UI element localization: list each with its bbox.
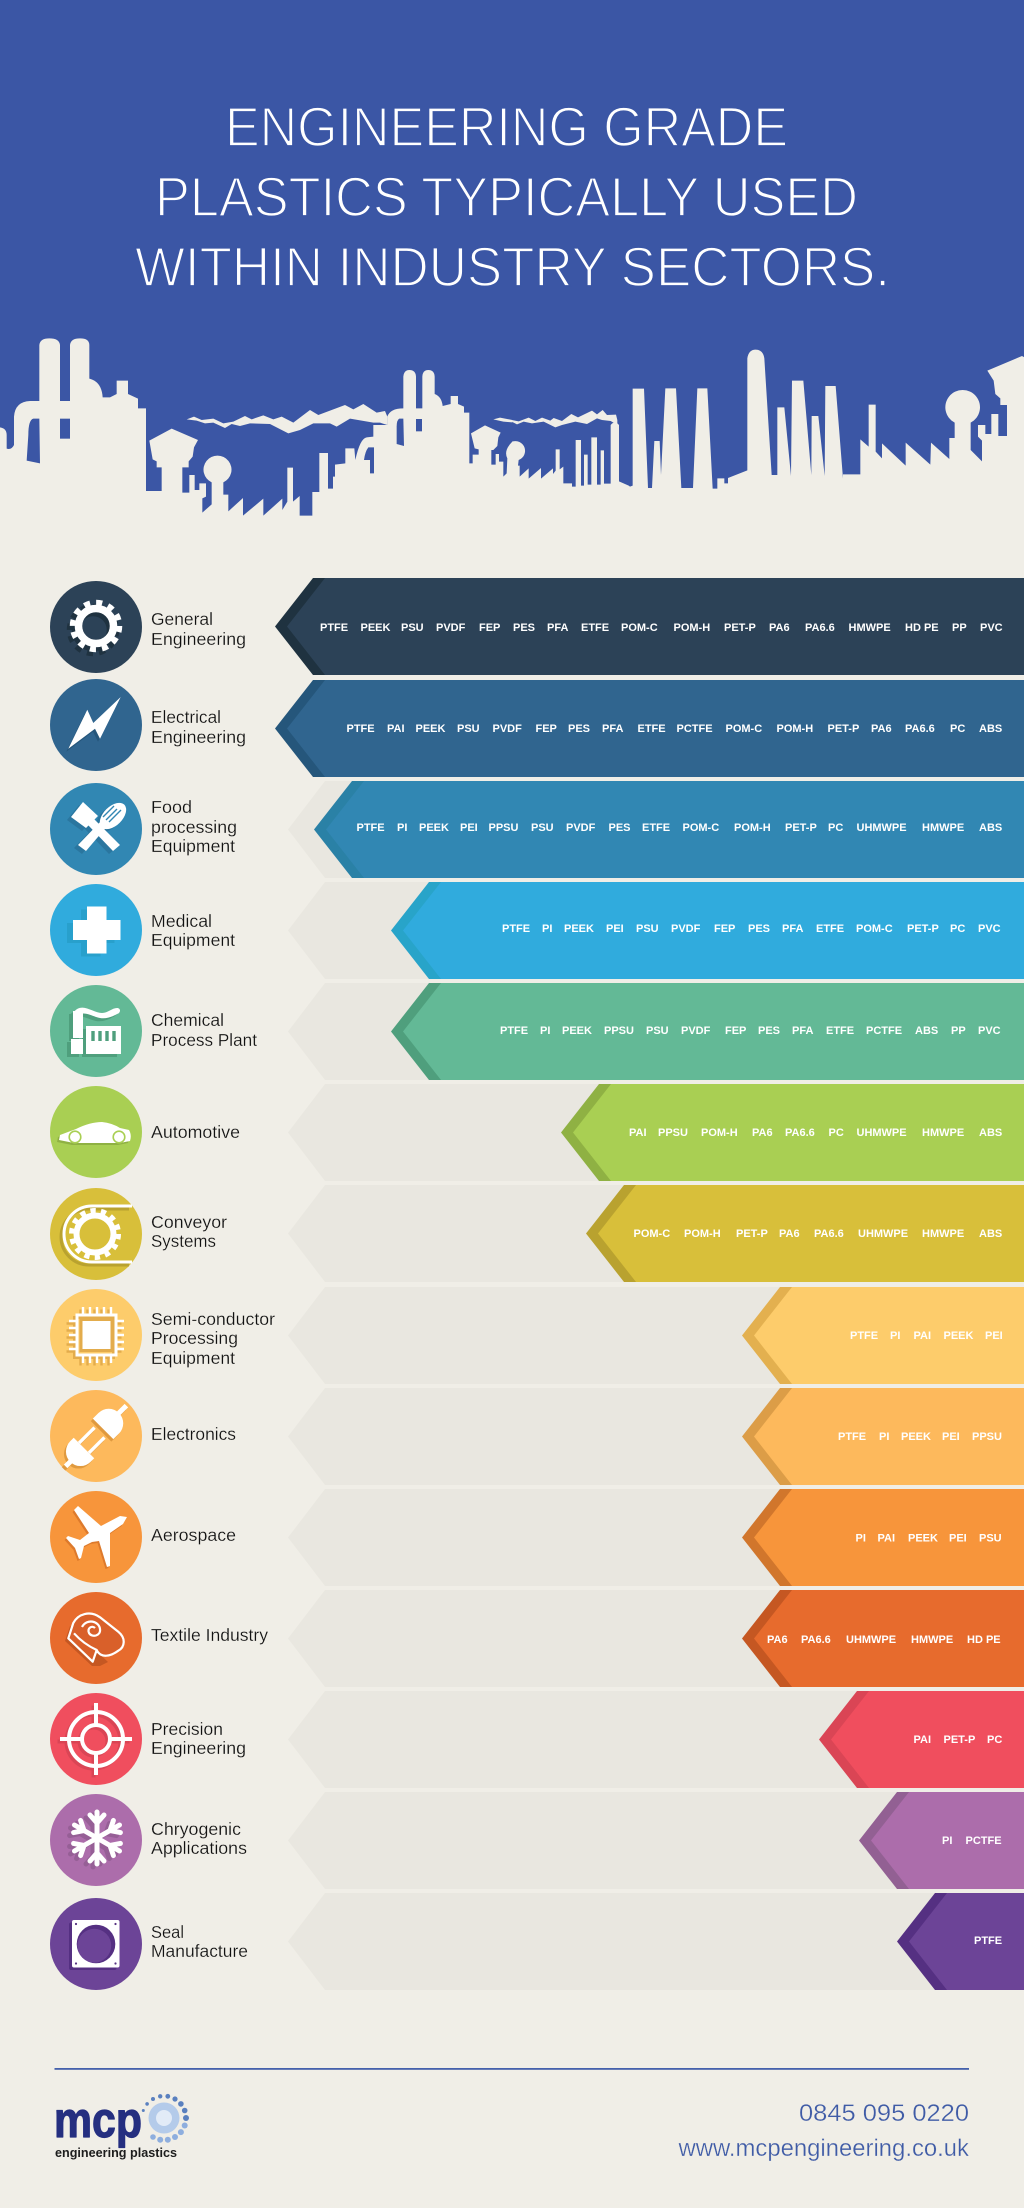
plastics list: PA6: [752, 1127, 773, 1139]
plastics list: HMWPE: [922, 1228, 964, 1240]
plastics list: ABS: [979, 822, 1002, 834]
plastics list: HMWPE: [922, 822, 964, 834]
plastics list: POM-H: [674, 622, 710, 634]
plastics list: PA6: [769, 622, 790, 634]
plastics list: PES: [758, 1025, 780, 1037]
plastics list: PPSU: [658, 1127, 688, 1139]
row: Food processing Equipment: [50, 781, 1024, 878]
plastics list: ETFE: [642, 822, 670, 834]
plastics list: ETFE: [816, 923, 844, 935]
plastics list: FEP: [536, 723, 557, 735]
row: Chemical Process Plant: [50, 983, 1024, 1080]
arrow bar: [742, 1287, 1024, 1384]
logo tagline: engineering plastics: [55, 2145, 177, 2160]
icon: fabric roll: [50, 1592, 142, 1684]
plastics list: PPSU: [604, 1025, 634, 1037]
plastics list: PAI: [387, 723, 405, 735]
plastics list: PSU: [636, 923, 659, 935]
icon: car: [50, 1086, 142, 1178]
plastics list: PET-P: [828, 723, 859, 735]
header banner: [0, 0, 1024, 560]
label: Textile Industry: Textile Industry: [151, 1625, 268, 1645]
icon: lightning bolt: [50, 679, 142, 771]
icon: crosshair target: [50, 1693, 142, 1785]
label: Food processing Equipment: processing: [151, 817, 237, 837]
plastics list: UHMWPE: [846, 1634, 896, 1646]
label: Semi-conductor Processing Equipment: Semi-conductor: [151, 1309, 275, 1329]
label: Seal Manufacture: Manufacture: [151, 1941, 248, 1961]
plastics list: PEI: [460, 822, 478, 834]
arrow bar: [742, 1590, 1024, 1687]
arrow bar: [742, 1388, 1024, 1485]
plastics list: PFA: [547, 622, 568, 634]
plastics list: PFA: [782, 923, 803, 935]
row: Aerospace: [50, 1489, 1024, 1586]
plastics list: POM-C: [682, 822, 719, 834]
plastics list: PVC: [978, 923, 1001, 935]
plastics list: PA6.6: [814, 1228, 844, 1240]
plastics list: PA6: [871, 723, 892, 735]
plastics list: PET-P: [944, 1734, 975, 1746]
arrow bar: [859, 1792, 1024, 1889]
label: Semi-conductor Processing Equipment: Equipment: [151, 1348, 235, 1368]
logo ring: [142, 2094, 189, 2143]
row: Textile Industry: [50, 1590, 1024, 1687]
plastics list: PET-P: [907, 923, 939, 935]
background track: [288, 882, 1024, 979]
plastics list: PEEK: [419, 822, 449, 834]
label: Chemical Process Plant: Chemical: [151, 1010, 224, 1030]
plastics list: POM-H: [684, 1228, 721, 1240]
arrow bar: [391, 882, 1024, 979]
label: Electrical Engineering: Engineering: [151, 727, 246, 747]
logo wordmark: mcp: [54, 2092, 142, 2148]
plastics list: ETFE: [638, 723, 666, 735]
plastics list: PEI: [606, 923, 624, 935]
plastics list: PP: [951, 1025, 966, 1037]
plastics list: PA6.6: [801, 1634, 831, 1646]
plastics list: UHMWPE: [856, 822, 907, 834]
plastics list: PPSU: [488, 822, 519, 834]
plastics list: UHMWPE: [856, 1127, 907, 1139]
background track: [288, 781, 1024, 878]
plastics list: POM-C: [856, 923, 893, 935]
plastics list: ABS: [979, 723, 1002, 735]
plastics list: PEEK: [562, 1025, 592, 1037]
plastics list: PES: [748, 923, 770, 935]
plastics list: PES: [513, 622, 535, 634]
plastics list: POM-H: [734, 822, 771, 834]
label: Medical Equipment: Equipment: [151, 930, 235, 950]
icon: conveyor roller: [50, 1188, 142, 1280]
plastics list: PSU: [646, 1025, 669, 1037]
icon: utensils: [50, 783, 142, 875]
plastics list: PP: [952, 622, 967, 634]
plastics list: PCTFE: [866, 1025, 902, 1037]
label: Semi-conductor Processing Equipment: Processing: [151, 1328, 238, 1348]
contact: phone number: 0845 095 0220: [799, 2100, 969, 2127]
plastics list: PI: [540, 1025, 550, 1037]
plastics list: PI: [542, 923, 552, 935]
plastics list: PC: [828, 822, 843, 834]
plastics list: PES: [568, 723, 590, 735]
row: Semi-conductor Processing Equipment: [50, 1287, 1024, 1384]
plastics list: PVC: [980, 622, 1003, 634]
label: Automotive: Automotive: [151, 1122, 240, 1142]
plastics list: PC: [987, 1734, 1002, 1746]
plastics list: PSU: [979, 1532, 1002, 1544]
arrow bar: [819, 1691, 1024, 1788]
plastics list: HMWPE: [911, 1634, 953, 1646]
plastics list: ABS: [979, 1228, 1002, 1240]
row: Electrical Engineering: [50, 679, 1024, 777]
plastics list: PVDF: [681, 1025, 711, 1037]
icon: snowflake: [50, 1794, 142, 1886]
plastics list: PTFE: [838, 1431, 866, 1443]
label: Medical Equipment: Medical: [151, 911, 212, 931]
arrow bar: [314, 781, 1024, 878]
plastics list: ETFE: [581, 622, 609, 634]
plastics list: PVDF: [436, 622, 466, 634]
row: Seal Manufacture: [50, 1893, 1024, 1990]
plastics list: PEI: [985, 1330, 1003, 1342]
plastics list: PA6.6: [805, 622, 835, 634]
plastics list: POM-H: [776, 723, 813, 735]
industrial skyline: [0, 338, 1024, 561]
row: General Engineering: [50, 578, 1024, 675]
title: ENGINEERING GRADE: [225, 95, 788, 158]
title: [135, 95, 890, 298]
icon: plug: [50, 1390, 142, 1482]
label: Chemical Process Plant: Process Plant: [151, 1030, 257, 1050]
plastics list: PTFE: [974, 1935, 1002, 1947]
plastics list: PC: [828, 1127, 844, 1139]
plastics list: PPSU: [972, 1431, 1002, 1443]
plastics list: UHMWPE: [858, 1228, 908, 1240]
contact: website: www.mcpengineering.co.uk: [678, 2135, 970, 2162]
background track: [288, 1893, 1024, 1990]
plastics list: FEP: [479, 622, 500, 634]
plastics list: PC: [950, 923, 965, 935]
plastics list: PCTFE: [966, 1835, 1002, 1847]
background track: [288, 1792, 1024, 1889]
plastics list: PAI: [914, 1734, 931, 1746]
plastics list: PEI: [942, 1431, 960, 1443]
plastics list: PTFE: [320, 622, 348, 634]
background track: [288, 1691, 1024, 1788]
plastics list: PSU: [457, 723, 480, 735]
row: Chryogenic Applications: [50, 1792, 1024, 1889]
plastics list: PA6.6: [905, 723, 935, 735]
plastics list: PI: [942, 1835, 952, 1847]
plastics list: POM-C: [726, 723, 762, 735]
plastics list: PTFE: [850, 1330, 878, 1342]
background track: [288, 1590, 1024, 1687]
label: General Engineering: Engineering: [151, 629, 246, 649]
plastics list: PAI: [914, 1330, 931, 1342]
arrow bar: [586, 1185, 1024, 1282]
plastics list: PEEK: [416, 723, 446, 735]
plastics list: PVC: [978, 1025, 1001, 1037]
plastics list: FEP: [725, 1025, 746, 1037]
plastics list: POM-C: [621, 622, 658, 634]
plastics list: PA6: [767, 1634, 788, 1646]
plastics list: PCTFE: [676, 723, 713, 735]
plastics list: HD PE: [967, 1634, 1001, 1646]
logo: mcp engineering plastics: [54, 2092, 189, 2160]
title: WITHIN INDUSTRY SECTORS.: [135, 235, 890, 298]
icon: gear: [50, 581, 142, 673]
plastics list: PTFE: [500, 1025, 528, 1037]
plastics list: PTFE: [346, 723, 375, 735]
label: Precision Engineering: Engineering: [151, 1738, 246, 1758]
plastics list: PEEK: [901, 1431, 931, 1443]
label: Chryogenic Applications: Chryogenic: [151, 1819, 241, 1839]
plastics list: PI: [397, 822, 407, 834]
plastics list: PTFE: [356, 822, 385, 834]
plastics list: PET-P: [785, 822, 817, 834]
icon: airplane: [50, 1491, 142, 1583]
background track: [288, 1084, 1024, 1181]
plastics list: POM-C: [634, 1228, 670, 1240]
arrow bar: [742, 1489, 1024, 1586]
plastics list: PEI: [949, 1532, 967, 1544]
icon: medical cross: [50, 884, 142, 976]
plastics list: PFA: [792, 1025, 813, 1037]
label: Food processing Equipment: Equipment: [151, 836, 235, 856]
plastics list: PVDF: [492, 723, 522, 735]
plastics list: FEP: [714, 923, 735, 935]
arrow bar: [275, 680, 1024, 777]
background track: [288, 1287, 1024, 1384]
plastics list: ABS: [979, 1127, 1002, 1139]
plastics list: PA6.6: [785, 1127, 815, 1139]
plastics list: PVDF: [671, 923, 701, 935]
plastics list: PI: [879, 1431, 889, 1443]
label: Aerospace: Aerospace: [151, 1525, 236, 1545]
label: Chryogenic Applications: Applications: [151, 1838, 247, 1858]
plastics list: ETFE: [826, 1025, 854, 1037]
plastics list: PVDF: [566, 822, 596, 834]
background track: [288, 1388, 1024, 1485]
plastics list: PEEK: [908, 1532, 938, 1544]
plastics list: PEEK: [944, 1330, 974, 1342]
row: Automotive: [50, 1084, 1024, 1181]
label: Conveyor Systems: Systems: [151, 1231, 216, 1251]
row: Precision Engineering: [50, 1691, 1024, 1788]
title: PLASTICS TYPICALLY USED: [155, 165, 858, 228]
plastics list: HMWPE: [922, 1127, 964, 1139]
plastics list: PET-P: [736, 1228, 768, 1240]
row: Electronics: [50, 1388, 1024, 1485]
icon: microchip: [50, 1289, 142, 1381]
icon: flange seal: [50, 1898, 142, 1990]
arrow bar: [561, 1084, 1024, 1181]
plastics list: HMWPE: [848, 622, 891, 634]
label: General Engineering: General: [151, 609, 213, 629]
plastics list: PC: [950, 723, 965, 735]
plastics list: PFA: [602, 723, 623, 735]
plastics list: PES: [608, 822, 631, 834]
plastics list: PTFE: [502, 923, 530, 935]
label: Conveyor Systems: Conveyor: [151, 1212, 227, 1232]
plastics list: PAI: [878, 1532, 895, 1544]
plastics list: PI: [890, 1330, 900, 1342]
plastics list: POM-H: [701, 1127, 738, 1139]
arrow bar: [275, 578, 1024, 675]
plastics list: PI: [856, 1532, 866, 1544]
label: Precision Engineering: Precision: [151, 1719, 223, 1739]
row: Conveyor Systems: [50, 1185, 1024, 1282]
arrow bar: [391, 983, 1024, 1080]
icon: factory: [50, 985, 142, 1077]
arrow bar: [897, 1893, 1024, 1990]
background track: [288, 983, 1024, 1080]
plastics list: PSU: [401, 622, 424, 634]
row: Medical Equipment: [50, 882, 1024, 979]
background track: [288, 1489, 1024, 1586]
plastics list: PA6: [779, 1228, 800, 1240]
plastics list: PSU: [531, 822, 554, 834]
plastics list: ABS: [915, 1025, 938, 1037]
background track: [288, 1185, 1024, 1282]
plastics list: HD PE: [905, 622, 939, 634]
plastics list: PAI: [629, 1127, 647, 1139]
label: Food processing Equipment: Food: [151, 797, 192, 817]
plastics list: PEEK: [360, 622, 391, 634]
plastics list: PEEK: [564, 923, 594, 935]
plastics list: PET-P: [724, 622, 756, 634]
label: Seal Manufacture: Seal: [151, 1922, 184, 1942]
label: Electronics: Electronics: [151, 1424, 236, 1444]
label: Electrical Engineering: Electrical: [151, 707, 221, 727]
